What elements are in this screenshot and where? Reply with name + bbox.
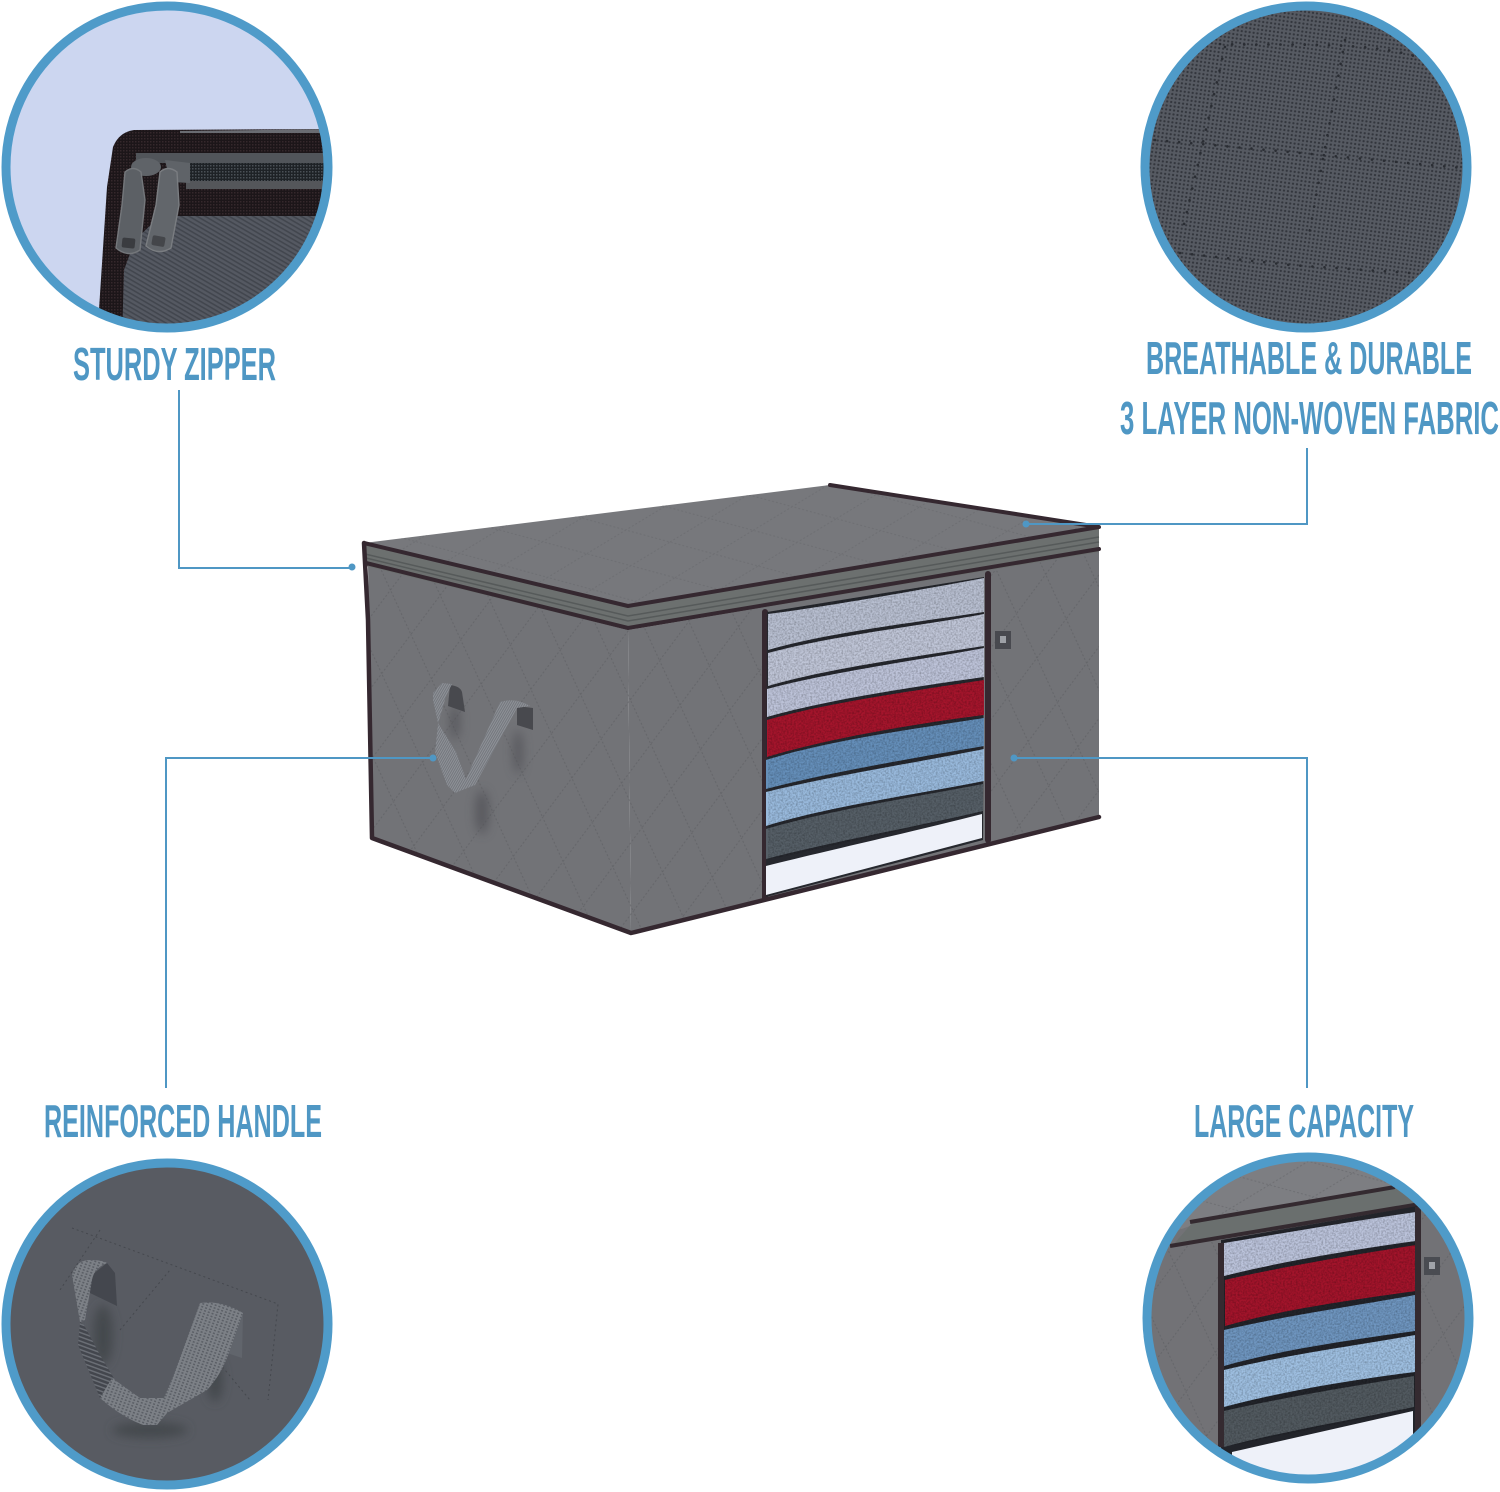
towel white	[766, 814, 982, 895]
towel light grey 2	[768, 614, 984, 686]
back tabs	[448, 685, 465, 712]
zipper stripes	[365, 537, 1099, 621]
product: storage bag	[364, 485, 1099, 933]
connector: zipper	[179, 390, 356, 570]
connector: capacity	[1010, 754, 1307, 1088]
zipper track	[136, 153, 336, 189]
bag front face	[628, 551, 1099, 933]
panel: handle detail	[6, 1163, 328, 1485]
left strap bottom	[78, 1322, 115, 1398]
connector: fabric	[1022, 448, 1307, 528]
grey edge of bag top	[180, 129, 320, 133]
connector: handle	[166, 754, 436, 1088]
heading: sturdy zipper: STURDY ZIPPER	[73, 338, 276, 390]
towel texture	[1220, 1205, 1420, 1450]
handle strap	[72, 1260, 243, 1425]
towel mid blue	[766, 718, 984, 789]
brand tag	[1424, 1257, 1440, 1275]
right strap	[157, 1302, 243, 1425]
handle shadows	[450, 704, 523, 834]
binding lines	[364, 485, 1099, 933]
stitching	[60, 1228, 278, 1400]
window frame	[1221, 1207, 1418, 1447]
connector dot	[430, 754, 436, 762]
back tabs	[90, 1263, 117, 1306]
pull slot left	[122, 237, 135, 249]
lid	[1179, 1162, 1391, 1230]
zipper sliders	[131, 158, 190, 183]
bag fabric	[122, 216, 316, 324]
connector dot	[1022, 520, 1030, 528]
bag corner binding	[99, 129, 323, 318]
zipper band	[364, 527, 1099, 630]
brand tag	[995, 631, 1011, 649]
panel: fabric detail	[1145, 6, 1467, 328]
bag left face	[368, 565, 631, 933]
towel light grey 1	[768, 578, 984, 650]
heading: reinforced handle: REINFORCED HANDLE	[44, 1095, 322, 1147]
bag lid top	[364, 485, 1099, 605]
connector dot	[1010, 754, 1018, 762]
handle strap	[433, 683, 533, 793]
towel mid blue	[1224, 1295, 1415, 1366]
pull slot right	[151, 235, 166, 247]
towel dark grey	[766, 784, 983, 859]
towel light grey 3	[767, 648, 984, 717]
panel: capacity detail	[1147, 1150, 1470, 1480]
right strap	[455, 700, 530, 793]
towel white	[1232, 1411, 1413, 1480]
panel: sturdy zipper detail	[6, 6, 340, 340]
zipper band	[1176, 1188, 1400, 1242]
window clothes stack	[760, 570, 990, 897]
towel red	[1225, 1245, 1416, 1326]
strap shadows	[93, 1305, 223, 1438]
zipper pull right	[146, 168, 179, 252]
towel pale blue	[1224, 1335, 1415, 1407]
towel light	[1224, 1212, 1416, 1276]
towel dark grey	[1224, 1376, 1414, 1447]
connector dot	[348, 564, 356, 570]
towel texture	[768, 578, 984, 858]
window clothes	[1220, 1205, 1420, 1480]
zipper pull left	[116, 168, 145, 254]
towel pale blue	[766, 749, 984, 826]
towel red	[767, 680, 984, 757]
left strap	[433, 683, 467, 793]
left strap top	[72, 1260, 107, 1322]
